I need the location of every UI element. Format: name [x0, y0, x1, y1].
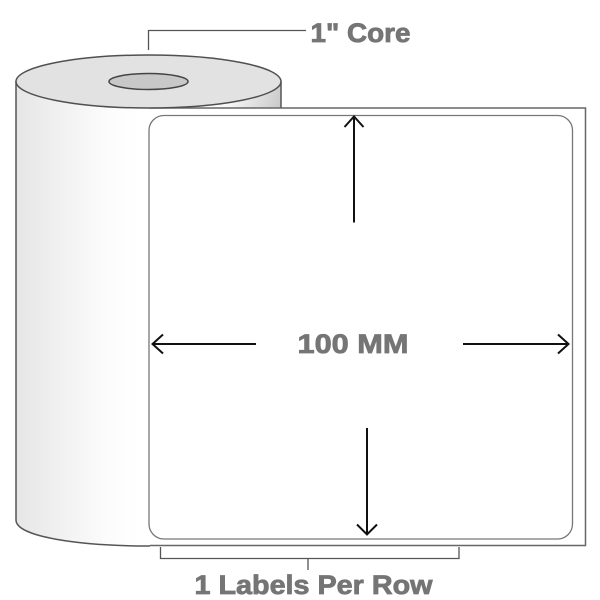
- core hole: [109, 74, 188, 90]
- roll top face: [16, 55, 281, 108]
- core label: 1" Core: [310, 18, 410, 48]
- arrow: left: [152, 334, 256, 354]
- row count label: 1 Labels Per Row: [194, 570, 433, 600]
- label outline: [149, 116, 572, 539]
- arrow: down: [357, 428, 377, 534]
- dimension label: 100 MM: [298, 329, 408, 359]
- label sheet: [150, 108, 586, 546]
- roll body: [16, 81, 300, 546]
- arrow: up: [344, 116, 364, 222]
- row width bracket: [160, 547, 459, 570]
- core callout leader: [148, 30, 306, 50]
- arrow: right: [463, 334, 568, 354]
